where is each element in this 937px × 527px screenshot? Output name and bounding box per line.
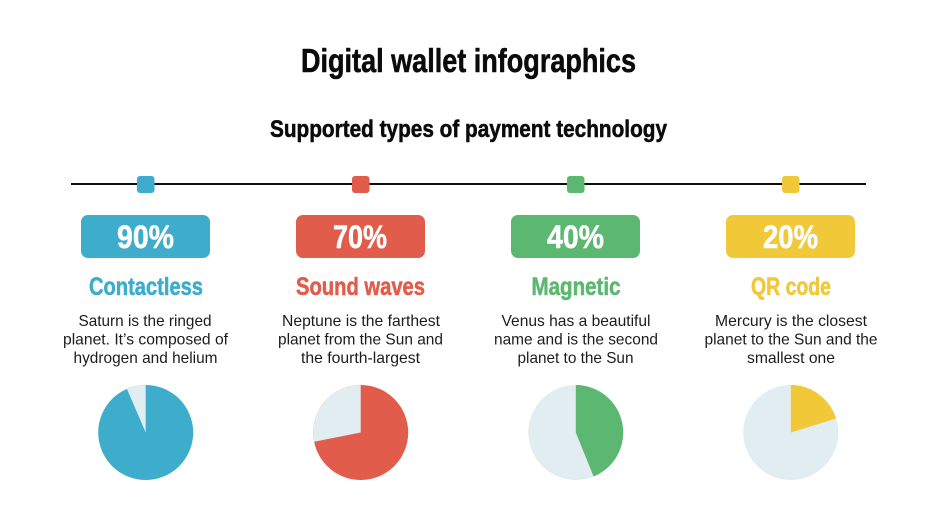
description: Mercury: Mercury is the closest — [715, 313, 868, 330]
percentage badge: 90%: 90% — [117, 219, 174, 255]
description: Neptune: planet from the Sun and — [278, 332, 443, 348]
panel: sound waves — [278, 215, 443, 480]
description: Saturn: Saturn is the ringed — [78, 313, 212, 330]
description: Mercury — [704, 313, 878, 367]
heading: Contactless: Contactless — [89, 273, 203, 301]
pie chart: 90% — [98, 385, 193, 480]
description: Saturn — [63, 313, 229, 367]
percentage badge: 20%: 20% — [763, 219, 818, 255]
description: Venus — [494, 313, 658, 367]
heading: Sound waves: Sound waves — [296, 273, 425, 301]
description: Mercury: smallest one — [747, 350, 835, 367]
pie chart: 40% — [528, 385, 623, 480]
description: Venus: planet to the Sun — [518, 350, 634, 367]
timeline — [71, 176, 866, 193]
percentage badge: 40%: 40% — [547, 219, 604, 255]
percentage badge: 90% — [81, 215, 210, 258]
percentage badge: 70% — [296, 215, 425, 258]
pie chart: 70% — [313, 385, 408, 480]
description: Saturn: hydrogen and helium — [74, 350, 218, 367]
pie chart: 20% — [743, 385, 838, 480]
percentage badge: 20% — [726, 215, 855, 258]
description: Mercury: planet to the Sun and the — [704, 332, 878, 348]
panel: contactless — [63, 215, 229, 480]
description: Venus: name and is the second — [494, 332, 658, 348]
description: Neptune: the fourth-largest — [301, 350, 421, 367]
description: Neptune: Neptune is the farthest — [282, 313, 441, 330]
subtitle: Supported types of payment technology — [270, 116, 667, 143]
heading: QR code: QR code — [751, 273, 831, 301]
heading: Magnetic: Magnetic — [532, 273, 621, 301]
panel: qr code — [704, 215, 878, 480]
panel: magnetic — [494, 215, 658, 480]
description: Neptune — [278, 313, 443, 367]
description: Saturn: planet. It’s composed of — [63, 332, 229, 348]
description: Venus: Venus has a beautiful — [502, 313, 650, 330]
percentage badge: 70%: 70% — [333, 219, 387, 255]
percentage badge: 40% — [511, 215, 640, 258]
title: Digital wallet infographics — [301, 43, 636, 80]
